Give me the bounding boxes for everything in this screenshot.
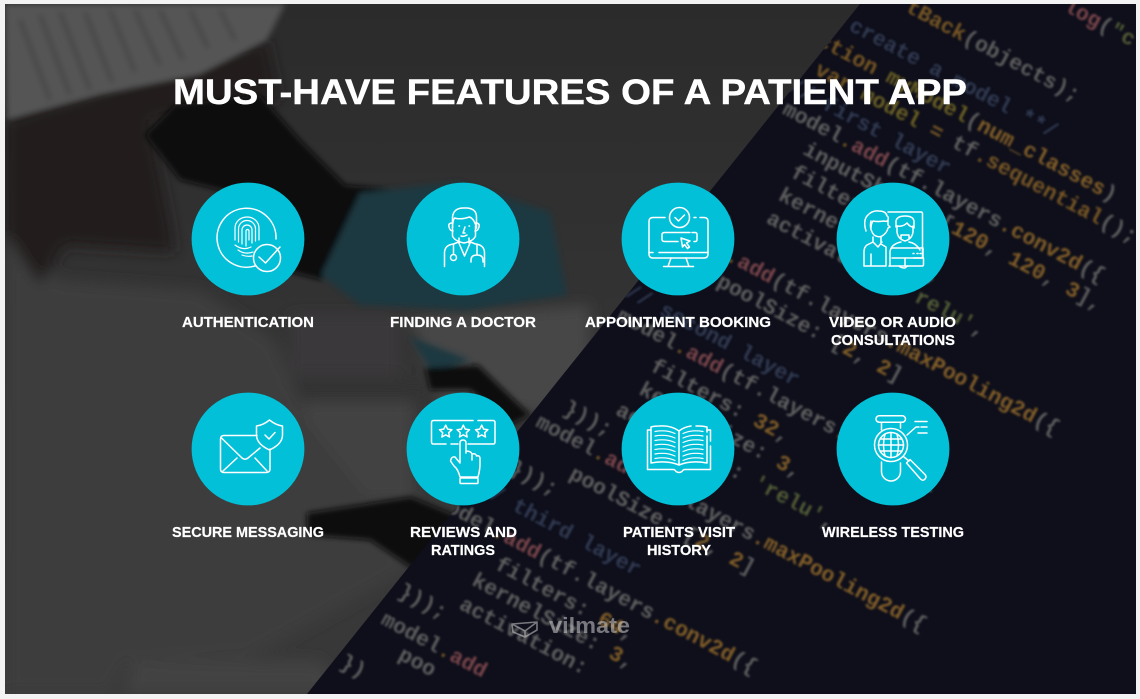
label: secure messaging: SECURE MESSAGING [172, 525, 324, 541]
label: video or audio consultations: CONSULTATIONS [831, 333, 955, 349]
panel: source code background: })); [505, 457, 562, 502]
panel: source code background: kernelSize: 3, [774, 184, 945, 290]
label: authentication: AUTHENTICATION [182, 315, 314, 331]
feature: secure messaging [172, 393, 324, 541]
panel: source code background: activation: 'relu', [611, 399, 839, 535]
panel: source code background: var model = tf.sequential(); [810, 59, 1140, 249]
label: patients visit history: HISTORY [647, 543, 711, 559]
panel: source code background: filters: 32, [786, 161, 934, 255]
feature: appointment booking [585, 183, 771, 331]
label: appointment booking: APPOINTMENT BOOKING [585, 315, 771, 331]
panel: source code background: function myModel(num_classes) [779, 11, 1121, 208]
feature: finding a doctor [390, 183, 536, 331]
feature: reviews and ratings [407, 393, 519, 559]
panel: source code background: // second layer [621, 281, 803, 393]
feature: patients visit history [622, 393, 735, 559]
label: reviews and ratings: RATINGS [431, 543, 495, 559]
panel: source code background: })); [394, 580, 451, 625]
panel: source code background: model.add(tf.layers.conv2d({ [778, 98, 1108, 289]
icon: patient and doctor on video screen [837, 183, 949, 295]
icon: monitor with booking field and cursor [622, 183, 734, 295]
label: video or audio consultations: VIDEO OR AUDIO [829, 315, 956, 331]
icon: logo envelope [512, 622, 537, 637]
panel: source code background: poolSize: [2, 2] [712, 270, 906, 389]
title: MUST-HAVE FEATURES OF A PATIENT APP [173, 73, 967, 112]
panel: source code background: }) [336, 651, 370, 684]
panel: source code background [300, 0, 1140, 694]
panel: source code background: // first layer [784, 75, 954, 181]
icon: test tube under magnifier [837, 393, 949, 505]
label: patients visit history [623, 525, 735, 559]
panel: source code background: poo [394, 644, 439, 683]
icon: doctor with stethoscope [407, 183, 519, 295]
label: wireless testing: WIRELESS TESTING [822, 525, 964, 541]
icon: three stars and pointing hand [407, 393, 519, 505]
panel: source code background: model.add(tf.layers.conv2d({ [613, 305, 943, 495]
icon: fingerprint with check [192, 183, 304, 295]
logo: vilmate [512, 613, 630, 638]
panel: source code background: model.add [377, 608, 490, 684]
panel: source code background: model.add(tf.layers.maxPooling2d({ [664, 214, 1063, 441]
icon: open book [622, 393, 734, 505]
icon: envelope with shield [192, 393, 304, 505]
panel: source code background: poolSize: [2, 2] [565, 463, 759, 581]
panel: source code background: filters: 32, [646, 355, 794, 449]
label: finding a doctor: FINDING A DOCTOR [390, 315, 536, 331]
label: patients visit history: PATIENTS VISIT [623, 525, 735, 541]
label: video or audio consultations [829, 315, 956, 349]
panel: source code background: // third layer [474, 477, 645, 583]
label: reviews and ratings: REVIEWS AND [410, 525, 517, 541]
panel: source code background: })); [681, 190, 737, 235]
feature: wireless testing [822, 393, 964, 541]
panel: source code background: activation: 'relu', [762, 207, 990, 344]
panel: source code background: filters: 64, [491, 553, 639, 647]
panel: source code background: model.add(tf.layers.maxPooling2d({ [531, 411, 930, 638]
label: reviews and ratings [410, 525, 517, 559]
logo wordmark: vilmate [549, 613, 630, 638]
panel: source code background: })); [559, 397, 616, 443]
panel: source code background: activation: [455, 593, 591, 681]
panel: source code background: kernelSize: 3, [635, 379, 805, 485]
panel: source code background: kernelSize: 3, [467, 569, 638, 675]
feature: authentication [182, 183, 314, 331]
panel: source code background: model.add(tf.layers.conv2d({ [431, 490, 761, 681]
panel: photo background of lab worker at microscope [5, 4, 860, 694]
panel: source code background: inputShape: [120, 120, 3], [799, 138, 1106, 317]
feature: video or audio consultations [829, 183, 956, 349]
